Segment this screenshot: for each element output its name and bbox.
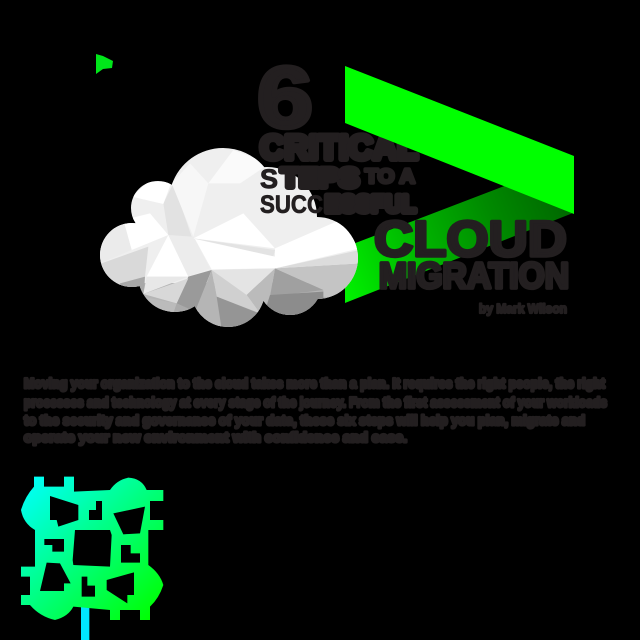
icon: small green flag <box>96 54 113 74</box>
arrow upper band <box>345 66 574 214</box>
icon body <box>21 477 163 620</box>
title: migration: MIGRATION <box>379 255 569 296</box>
intro text block <box>24 375 607 445</box>
icon stem <box>81 605 89 640</box>
title: steps to a <box>260 163 415 194</box>
arrow lower chevron <box>345 185 573 303</box>
icon: cloud network logo <box>21 477 163 640</box>
cloud illustration <box>100 148 358 327</box>
to a: TO A <box>365 166 415 188</box>
byline: by Mark Wilson <box>479 301 567 316</box>
intro text block: to the security and governance of your data, these six steps will help you plan, migrate and <box>24 412 585 428</box>
intro text block: operate your new environment with confidence and ease. <box>24 429 407 445</box>
title: cloud: CLOUD <box>374 211 567 267</box>
title: number 6: 6 <box>257 50 313 146</box>
essful: ESSFUL <box>325 191 416 218</box>
succ: SUCC <box>260 191 323 219</box>
steps: S <box>260 164 278 194</box>
green logo arrow <box>345 66 574 303</box>
steps remainder: TEPS <box>281 163 359 193</box>
title: successful <box>260 191 416 219</box>
title: critical: CRITICAL <box>260 129 418 167</box>
